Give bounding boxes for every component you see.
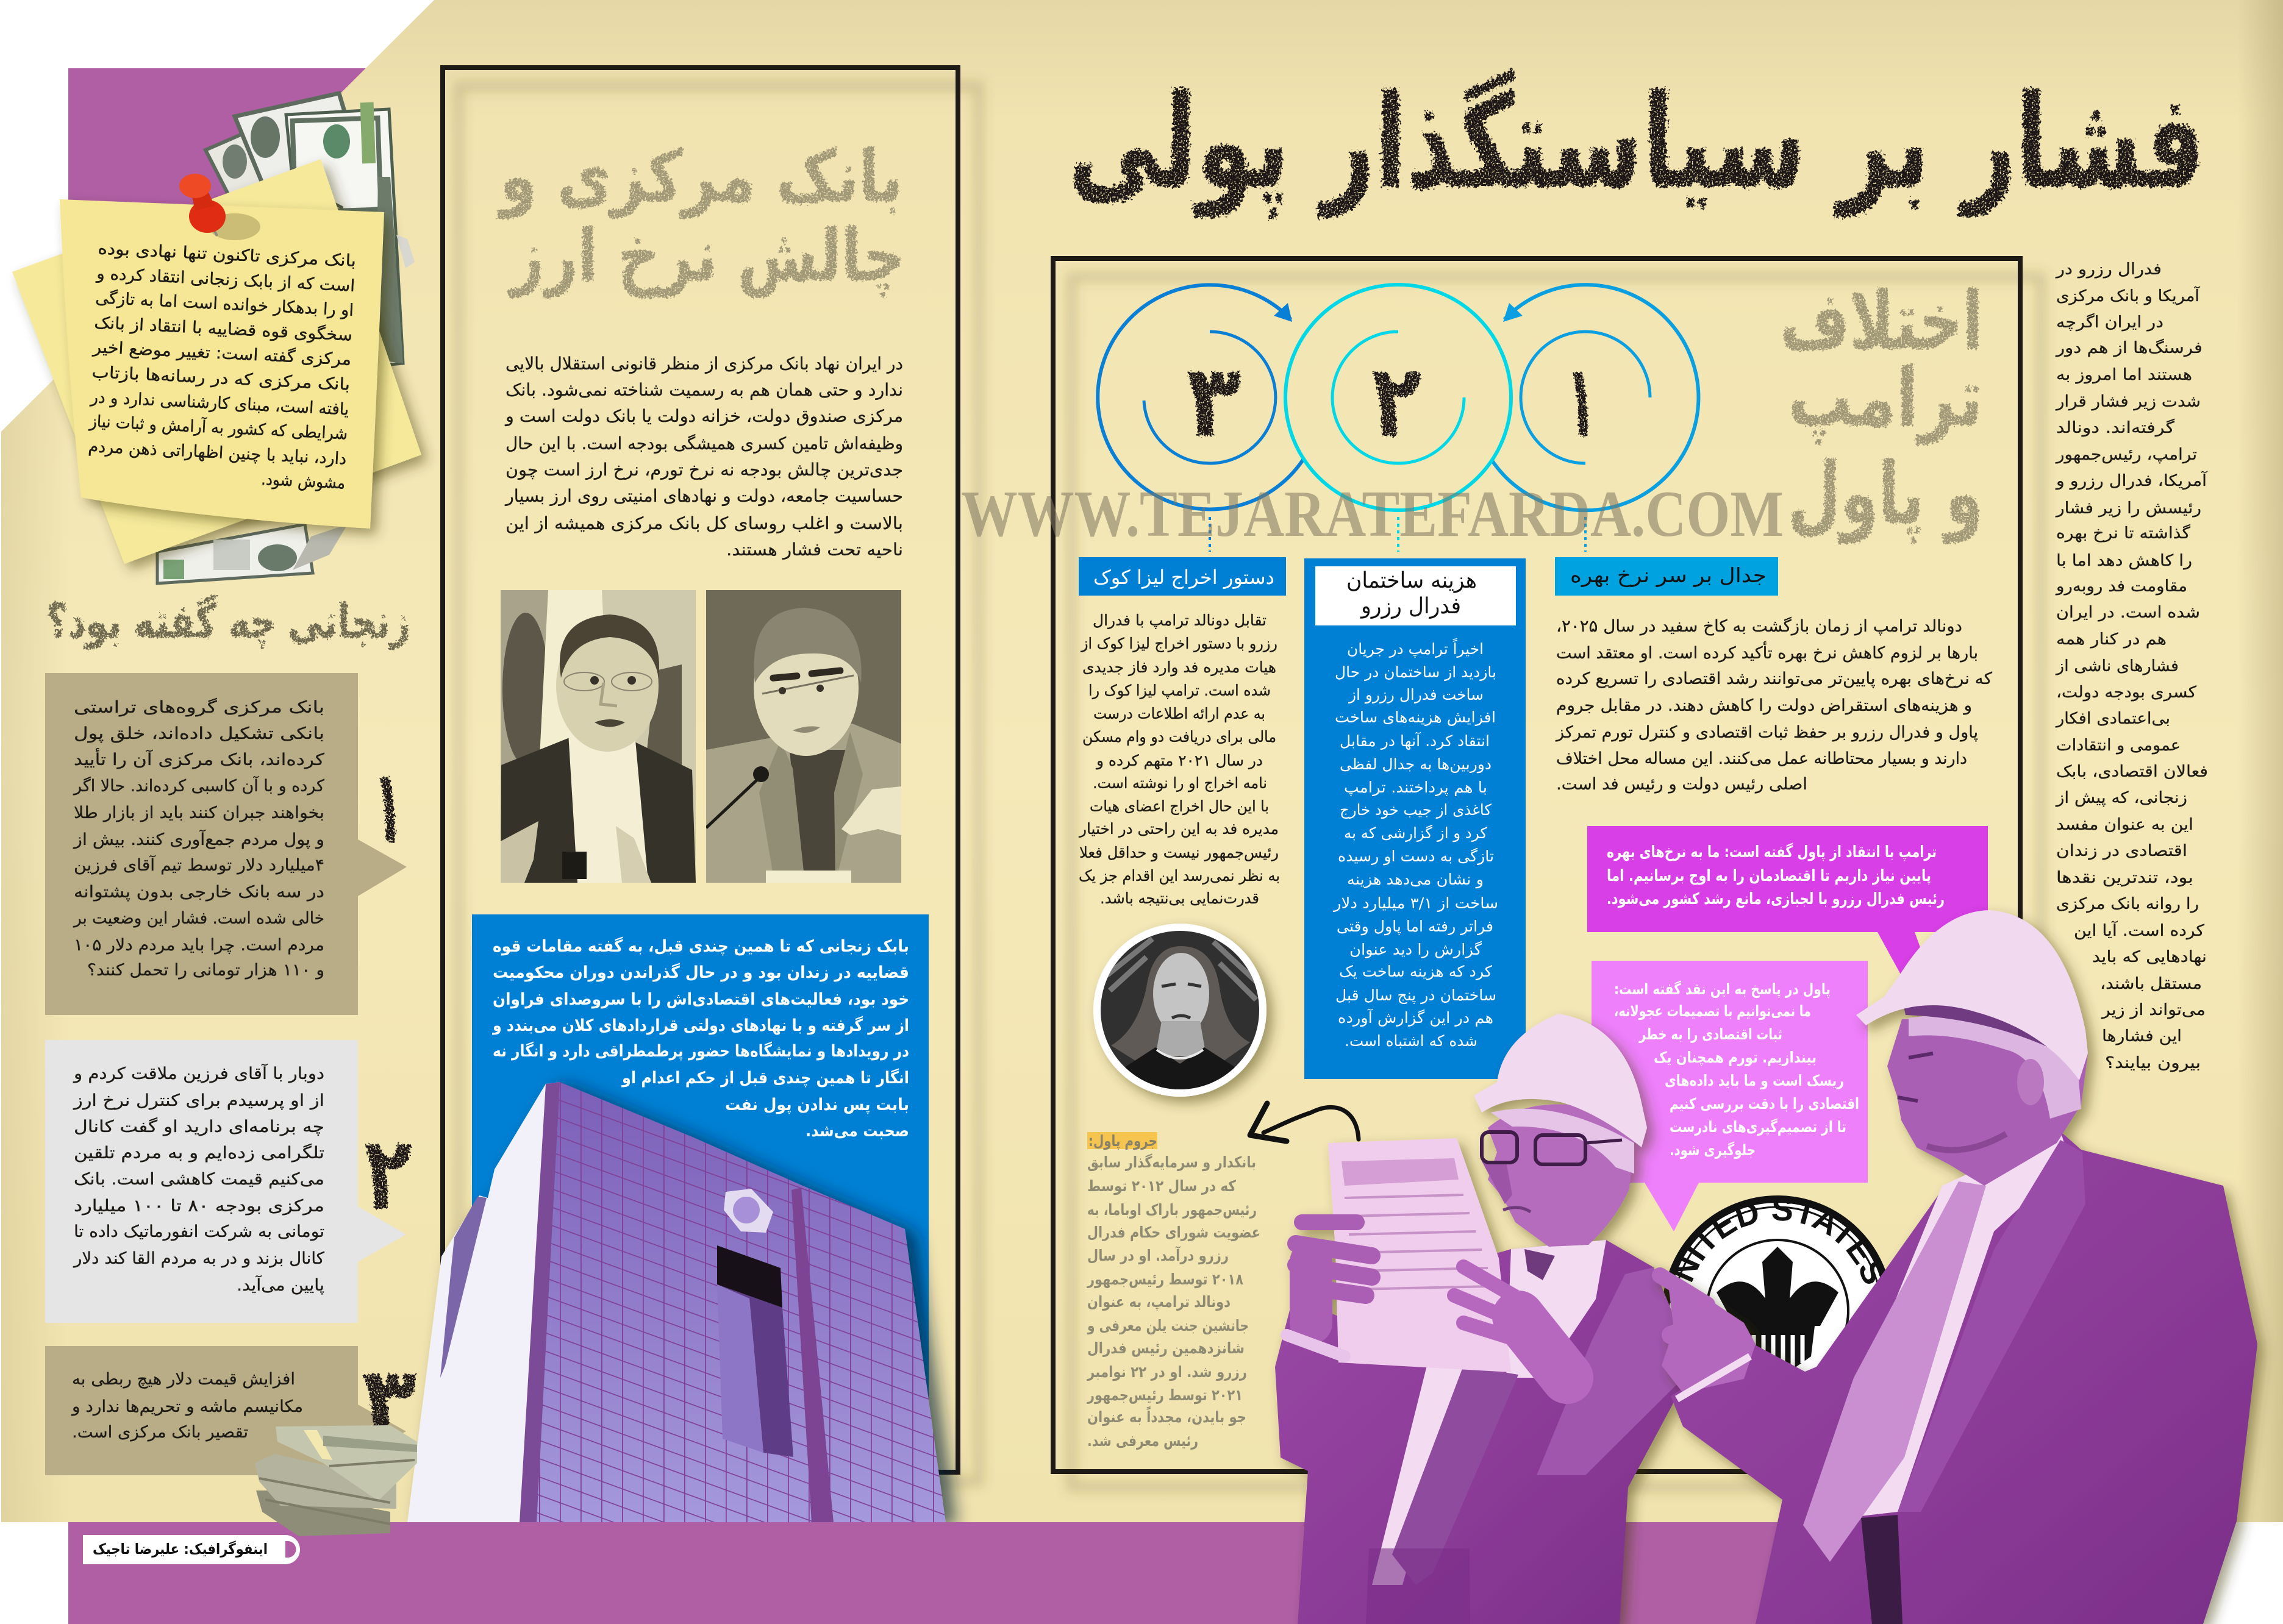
interest rate paragraph: دونالد ترامپ از زمان بازگشت به کاخ سفید در سال ۲۰۲۵،	[1556, 616, 1962, 636]
powell quote text: ریسک است و ما باید داده‌های	[1665, 1072, 1844, 1090]
right column text: زنجانی، که پیش از	[2055, 789, 2187, 807]
callout text: قضاییه در زندان بود و در حال گذراندن دوران محکومیت	[493, 963, 909, 982]
building cost paragraph: ساخت از ۳/۱ میلیارد دلار	[1332, 894, 1498, 912]
bio text: رزرو شد. او در ۲۲ نوامبر	[1086, 1363, 1247, 1381]
text: ۱	[373, 748, 404, 865]
powell head	[1482, 1105, 1634, 1247]
building cost paragraph: هم در این گزارش آورده	[1338, 1008, 1493, 1027]
credit text: اینفوگرافیک: علیرضا تاجیک	[93, 1540, 268, 1558]
building cost paragraph: دوربین‌ها به جدال لفظی	[1340, 755, 1492, 774]
interest rate paragraph: دارند و بسیار محتاطانه عمل می‌کنند. این مساله محل اختلاف	[1556, 749, 1967, 768]
callout text: صحبت می‌شد.	[806, 1122, 909, 1141]
icon: red pushpin	[179, 174, 260, 240]
diagram: three linked circles	[1098, 285, 1698, 552]
circle numerals: ۳	[1186, 343, 1241, 460]
lisa cook paragraph: رئیس‌جمهور نیست و حداقل فعلا	[1079, 844, 1279, 862]
note text: سخگوی قوه قضاییه با انتقاد از بانک	[94, 313, 353, 345]
lisa cook paragraph: به عدم ارائه اطلاعات درست	[1093, 705, 1265, 722]
lisa cook paragraph: مالی برای دریافت دو وام مسکن	[1082, 728, 1276, 746]
lisa cook paragraph: تقابل دونالد ترامپ با فدرال	[1093, 611, 1267, 630]
powell quote text: اقتصادی را با دقت بررسی کنیم	[1670, 1095, 1859, 1113]
quote 3 text: مکانیسم ماشه و تحریم‌ها ندارد و	[71, 1397, 303, 1416]
number 3: ۳	[362, 1345, 416, 1462]
trump shirt and tie	[1803, 1131, 2070, 1624]
heading: disagreement	[1780, 274, 1983, 544]
right column text: اقتصادی در زندان	[2056, 842, 2187, 860]
icon: federal reserve seal: UNITED STATES	[1670, 1203, 1881, 1303]
front sticky note	[60, 199, 384, 529]
quote 1 text: و پول مردم جمع‌آوری کنند. بیش از	[73, 830, 324, 849]
circle numerals: ۲	[1371, 343, 1421, 460]
right column text: کسری بودجه دولت،	[2056, 683, 2197, 702]
bio text: ۲۰۲۱ توسط رئیس‌جمهور	[1086, 1386, 1243, 1405]
callout text: از سر گرفته و با نهادهای دولتی قراردادهای کلان می‌بندد و	[491, 1016, 909, 1035]
bio text: رئیس معرفی شد.	[1087, 1432, 1198, 1450]
central bank body text: ندارد و حتی همان هم به رسمیت شناخته نمی‌شود. بانک	[506, 380, 903, 400]
lisa cook paragraph: رزرو با دستور اخراج لیزا کوک از	[1080, 635, 1277, 653]
purple footer band	[68, 1522, 2196, 1624]
right column text: مستقل باشند،	[2100, 975, 2202, 993]
building cost paragraph: ساخت فدرال رزرو از	[1348, 686, 1484, 704]
interest rate paragraph: پاول و فدرال رزرو بر حفظ ثبات اقتصادی و کنترل تورم تمرکز	[1555, 723, 1978, 742]
powell shirt and tie	[1366, 1240, 1695, 1624]
powell quote text: ما نمی‌توانیم با تصمیمات عجولانه،	[1614, 1002, 1811, 1020]
photo: farzin	[706, 590, 901, 883]
right column text: گرفته‌اند. دونالد	[2056, 418, 2175, 437]
bio text: رئیس‌جمهور باراک اوباما، به	[1087, 1201, 1257, 1219]
panel: quote box 2	[45, 1040, 406, 1323]
right column text: را روانه بانک مرکزی	[2056, 895, 2199, 913]
lisa cook paragraph: شده است. ترامپ لیزا کوک را	[1088, 682, 1271, 699]
quote 1 text: و ۱۱۰ هزار تومانی را تحمل کنند؟	[87, 961, 324, 980]
header: lisa cook: دستور اخراج لیزا کوک	[1093, 566, 1274, 589]
quote 1 text: ۴میلیارد دلار توسط تیم آقای فرزین	[74, 855, 324, 875]
building cost paragraph: انتقاد کرد. آنها در مقابل	[1340, 732, 1490, 750]
trump quote text: پایین نیاز داریم تا اقتصادمان را به اوج برسانیم. اما	[1607, 867, 1931, 885]
building cost paragraph: کرد که هزینه ساخت یک	[1339, 963, 1492, 980]
right column text: در ایران اگرچه	[2056, 313, 2163, 332]
building: central bank	[407, 1082, 946, 1523]
lisa cook paragraph	[1078, 611, 1280, 907]
quote 3 text	[71, 1370, 303, 1442]
trump lapel	[1898, 1140, 2085, 1512]
callout text: انگار تا همین چندی قبل از حکم اعدام او	[621, 1068, 909, 1088]
section: lisa cook	[1078, 557, 1286, 1097]
interest rate paragraph: که نرخ‌های بهره پایین‌تر می‌توانند رشد اقتصادی را تسریع کرده	[1556, 669, 1992, 688]
watermark: WWW.TEJARATEFARDA.COM	[961, 478, 1784, 550]
section: interest rate dispute	[1555, 557, 1992, 794]
note text: دارد، نباید با چنین اظهاراتی ذهن مردم	[88, 437, 347, 469]
document held by powell	[1328, 1138, 1511, 1372]
right column text: شده است. در ایران	[2056, 604, 2200, 622]
circle numerals	[1186, 343, 1596, 460]
right column text: می‌تواند از زیر	[2101, 1001, 2206, 1019]
note text	[85, 239, 357, 493]
lisa cook paragraph: نامه اخراج او را نوشته است.	[1093, 774, 1267, 792]
interest rate paragraph	[1555, 616, 1992, 794]
quote 2 text: کانال بزند و در به مردم القا کند دلار	[73, 1249, 324, 1268]
heading: disagreement: اختلاف	[1780, 274, 1983, 368]
quote 2 text: می‌کنیم قیمت کاهشی است. بانک	[74, 1170, 324, 1189]
lisa cook paragraph: مدیره فد به این راحتی در اختیار	[1078, 820, 1279, 838]
callout text: خود بود، فعالیت‌های اقتصادی‌اش را با سروصدای فراوان	[493, 990, 909, 1009]
bio text: جانشین جنت یلن معرفی و	[1086, 1317, 1249, 1335]
quote 1 text	[73, 697, 324, 980]
quote 2 text: تومانی به شرکت انفورماتیک داده تا	[74, 1222, 324, 1241]
trump suit	[1671, 1131, 2257, 1624]
circle 2	[1285, 285, 1511, 552]
heading: central bank challenge: بانک مرکزی و	[498, 134, 903, 219]
trump hard hat	[1856, 910, 2088, 1080]
right column text: آمریکا و بانک مرکزی	[2056, 286, 2201, 305]
lisa cook paragraph: هیات مدیره فد وارد فاز جدیدی	[1082, 658, 1276, 677]
right column text: ترامپ، رئیس‌جمهور	[2055, 446, 2197, 464]
purple corner block	[68, 68, 378, 390]
quote 1 text: کرده‌اند، بانک مرکزی آن را تأیید	[74, 747, 324, 769]
icon: banknotes	[157, 93, 415, 583]
central bank body text: بالاست و اغلب روسای کل بانک مرکزی همیشه از این	[506, 513, 903, 533]
building cost paragraph: بازدید از ساختمان در حال	[1335, 663, 1496, 681]
central bank body text: ناحیه تحت فشار هستند.	[726, 540, 903, 560]
bio text: شانزدهمین رئیس فدرال	[1087, 1339, 1245, 1358]
right column text: این به عنوان مفسد	[2056, 816, 2193, 834]
right column text: بی‌اعتمادی افکار	[2055, 710, 2170, 728]
name tag: جروم پاول:	[1088, 1132, 1157, 1150]
lisa cook paragraph: به نظر نمی‌رسد این اقدام جز یک	[1079, 867, 1280, 885]
right column text: عمومی و انتقادات	[2056, 736, 2181, 755]
building cost paragraph: تازگی به دست او رسیده	[1338, 847, 1494, 866]
right column text: فعالان اقتصادی، بابک	[2056, 763, 2208, 781]
bio text	[1086, 1153, 1260, 1450]
building cost paragraph: با هم پرداختند. ترامپ	[1344, 778, 1487, 797]
quote 3 text: تقصیر بانک مرکزی است.	[72, 1423, 248, 1442]
heading: zanjani: زنجانی چه گفته بود؟	[47, 594, 410, 649]
arrow: hand drawn pointer	[1250, 1103, 1359, 1141]
building cost paragraph: کاغذی از جیب خود خارج	[1340, 801, 1492, 819]
right column text: بیرون بیایند؟	[2105, 1054, 2201, 1072]
icon: central bank logo	[724, 1189, 773, 1233]
panel: quote box 1	[45, 673, 407, 1015]
central bank body text: وظیفه‌اش تامین کسری همیشگی بودجه است. با این حال	[506, 433, 903, 454]
heading: central bank challenge	[498, 134, 905, 298]
building cost paragraph: و نشان می‌دهد هزینه	[1347, 871, 1484, 889]
quote 2 text: دوبار با آقای فرزین ملاقت کردم و	[73, 1064, 324, 1083]
right column text: شدت زیر فشار قرار	[2055, 393, 2201, 411]
quote 1 text: کرده و با آن کاسبی کرده‌اند. حالا اگر	[73, 776, 324, 796]
trump quote text	[1607, 842, 1945, 908]
note text: بانک مرکزی که در رسانه‌ها بازتاب	[91, 363, 351, 394]
back sticky note	[12, 159, 421, 564]
bio text: ۲۰۱۸ توسط رئیس‌جمهور	[1086, 1270, 1243, 1289]
panel: central bank column frame	[443, 68, 979, 1482]
quote 2 text: تلگرامی زده‌ایم و به مردم تلقین	[74, 1143, 324, 1163]
right column text: رئیسش را زیر فشار	[2055, 499, 2201, 518]
powell hard hat	[1474, 1014, 1647, 1147]
right column text: کرده است. آیا این	[2074, 921, 2205, 940]
circle 1	[1492, 285, 1698, 552]
right column text: گذاشته تا نرخ بهره	[2056, 524, 2191, 543]
building cost paragraph: اخیراً ترامپ در جریان	[1347, 638, 1484, 658]
right column text	[2055, 260, 2208, 1072]
section: jerome powell bio	[1086, 1132, 1260, 1450]
note text: شرایطی که کشور به آرامش و ثبات نیاز	[88, 411, 348, 444]
bio text: جو بایدن، مجدداً به عنوان	[1087, 1406, 1246, 1426]
trump quote text: ترامپ با انتقاد از پاول گفته است: ما به نرخ‌های بهره	[1607, 842, 1937, 861]
right column text: بود، تندترین نقدها	[2056, 869, 2193, 887]
callout text: بابک زنجانی که تا همین چندی قبل، به گفته مقامات قوه	[493, 936, 909, 956]
trump head	[1887, 997, 2088, 1186]
quote 1 text: بخواهند جبران کنند باید از بازار طلا	[74, 803, 324, 822]
quote 1 text: بانکی تشکیل داده‌اند، خلق پول	[74, 724, 324, 743]
speech bubble: trump	[1587, 826, 1988, 1000]
quote 2 text: چه برنامه‌ای دارید او گفت کانال	[74, 1117, 324, 1136]
photo: zanjani	[501, 590, 696, 883]
figure: donald trump	[1660, 910, 2257, 1624]
quote 2 text	[73, 1064, 324, 1295]
callout text: در رویدادها و نمایشگاه‌ها حضور پرطمطراقی دارد و انگار نه	[493, 1041, 909, 1061]
panel: main trump powell frame	[1053, 258, 2041, 1487]
quote 2 text: از او پرسیدم برای کنترل نرخ ارز	[73, 1091, 324, 1110]
heading: disagreement: و پاول	[1788, 444, 1983, 544]
speech bubble: powell	[1592, 961, 1868, 1231]
powell quote text: جلوگیری شود.	[1670, 1141, 1756, 1159]
right column text: فشارهای ناشی از	[2055, 657, 2179, 675]
powell suit	[1275, 1240, 1695, 1624]
central bank body text: در ایران نهاد بانک مرکزی از منظر قانونی استقلال بالایی	[506, 354, 903, 374]
note text: است که از بابک زنجانی انتقاد کرده و	[95, 264, 355, 296]
footer credit	[83, 1535, 300, 1564]
right column text: آمریکا، فدرال رزرو و	[2055, 471, 2208, 490]
interest rate paragraph: و هزینه‌های استقراض دولت را کاهش دهند. در مقابل جروم	[1556, 696, 1972, 715]
bio text: عضویت شورای حکام فدرال	[1087, 1223, 1260, 1242]
callout text: بابت پس ندادن پول نفت	[725, 1095, 909, 1114]
header: interest rate: جدال بر سر نرخ بهره	[1570, 563, 1767, 587]
right column text: هم در کنار همه	[2056, 630, 2167, 649]
bio text: دونالد ترامپ، به عنوان	[1087, 1293, 1231, 1311]
header: building cost	[1315, 566, 1516, 625]
header: lisa cook	[1079, 557, 1286, 596]
quote 1 text: مردم است. چرا باید مردم دلار ۱۰۵	[74, 936, 324, 955]
building cost paragraph: گزارش را دید عنوان	[1349, 941, 1482, 958]
icon: money stack	[255, 1425, 417, 1536]
building cost paragraph: فراتر رفته اما پاول وقتی	[1337, 917, 1493, 936]
panel: money fan behind notes	[157, 93, 415, 583]
powell right hand	[1454, 1267, 1567, 1378]
circle 3	[1098, 285, 1303, 552]
building cost paragraph	[1332, 638, 1498, 1050]
powell quote text	[1614, 980, 1859, 1159]
right column text: هستند اما امروز به	[2056, 366, 2192, 384]
powell quote text: بیندازیم. تورم همچنان یک	[1654, 1049, 1817, 1067]
central bank body text	[504, 354, 903, 560]
powell left hand	[1287, 1222, 1372, 1356]
note text: مشوش شود.	[261, 470, 346, 493]
note text: یافته است، مبنای کارشناسی ندارد و در	[89, 388, 349, 419]
quote 1 text: در سه بانک خارجی بدون پشتوانه	[74, 883, 324, 902]
central bank body text: جدی‌ترین چالش بودجه نه نرخ تورم، نرخ ارز است چون	[506, 460, 903, 480]
bio text: بانکدار و سرمایه‌گذار سابق	[1087, 1153, 1256, 1172]
section: fed building cost	[1304, 558, 1526, 1079]
right column text: مقاومت فد روبه‌رو	[2055, 577, 2187, 596]
quote 1 text: خالی شده است. فشار این وضعیت بر	[73, 909, 324, 928]
lisa cook paragraph: قدرت‌نمایی بی‌نتیجه باشد.	[1100, 889, 1259, 907]
right column text: فرسنگ‌ها از هم دور	[2055, 338, 2203, 357]
powell quote text: پاول در پاسخ به این نقد گفته است:	[1614, 980, 1831, 999]
panel: zanjani blue callout	[472, 914, 929, 1402]
interest rate paragraph: اصلی رئیس دولت و رئیس فد است.	[1556, 775, 1807, 794]
note text: بانک مرکزی تاکنون تنها نهادی بوده	[98, 239, 357, 271]
building cost paragraph: شده که اشتباه است.	[1345, 1032, 1477, 1050]
header: interest rate	[1555, 557, 1778, 596]
interest rate paragraph: بارها بر لزوم کاهش نرخ بهره تأکید کرده است. او معتقد است	[1556, 641, 1978, 663]
heading: disagreement: ترامپ	[1788, 351, 1983, 445]
icon: purple d shape	[285, 1541, 296, 1558]
powell quote text: ثبات اقتصادی را به خطر	[1638, 1025, 1782, 1044]
central bank body text: مرکزی صندوق دولت، خزانه دولت یا بانک دولت است و	[504, 406, 903, 426]
central bank body text: حساسیت جامعه، دولت و نهادهای امنیتی روی ارز بسیار	[504, 486, 903, 506]
right column text: فدرال رزرو در	[2055, 260, 2162, 279]
right column text: را کاهش دهد اما با	[2056, 552, 2192, 570]
lisa cook paragraph: با این حال اخراج اعضای هیات	[1090, 797, 1269, 816]
note text: مرکزی گفته است: تغییر موضع اخیر	[91, 337, 352, 369]
trump quote text: رئیس فدرال رزرو با لجبازی، مانع رشد کشور می‌شود.	[1607, 890, 1945, 908]
quote 2 text: پایین می‌آید.	[237, 1275, 324, 1295]
panel: quote box 3	[45, 1346, 406, 1475]
callout text	[491, 936, 909, 1141]
header: building cost: فدرال رزرو	[1360, 594, 1461, 619]
quote 1 text: بانک مرکزی گروه‌های تراستی	[74, 697, 324, 717]
text: ۱	[1566, 343, 1596, 460]
heading: central bank challenge: چالش نرخ ارز	[509, 213, 905, 298]
quote 2 text: مرکزی بودجه ۸۰ تا ۱۰۰ میلیارد	[74, 1197, 324, 1216]
trump hand	[1660, 1275, 1756, 1399]
lisa cook paragraph: در سال ۲۰۲۱ متهم کرده و	[1095, 752, 1263, 770]
header: building cost: هزینه ساختمان	[1346, 568, 1477, 593]
powell quote text: تا از تصمیم‌گیری‌های نادرست	[1670, 1118, 1846, 1136]
portrait: lisa cook	[1093, 924, 1267, 1097]
building cost paragraph: ساختمان در پنج سال قبل	[1335, 986, 1496, 1005]
number 2: ۲	[364, 1115, 412, 1232]
figure: jerome powell	[1275, 1014, 1695, 1624]
building cost paragraph: کرد و از گزارشی که به	[1344, 824, 1487, 842]
bio text: رزرو درآمد. او در سال	[1087, 1246, 1229, 1265]
panel: sticky notes	[12, 159, 421, 564]
building cost paragraph: افزایش هزینه‌های ساخت	[1335, 708, 1496, 726]
note text: او را بدهکار خوانده است اما به تازگی	[95, 288, 354, 320]
right column text: این فشارها	[2102, 1027, 2182, 1045]
bio text: که در سال ۲۰۱۲ توسط	[1087, 1177, 1236, 1195]
icon: federal reserve seal	[1663, 1195, 1885, 1372]
right column text: نهادهایی که باید	[2092, 948, 2207, 966]
quote 3 text: افزایش قیمت دلار هیچ ربطی به	[72, 1370, 295, 1389]
